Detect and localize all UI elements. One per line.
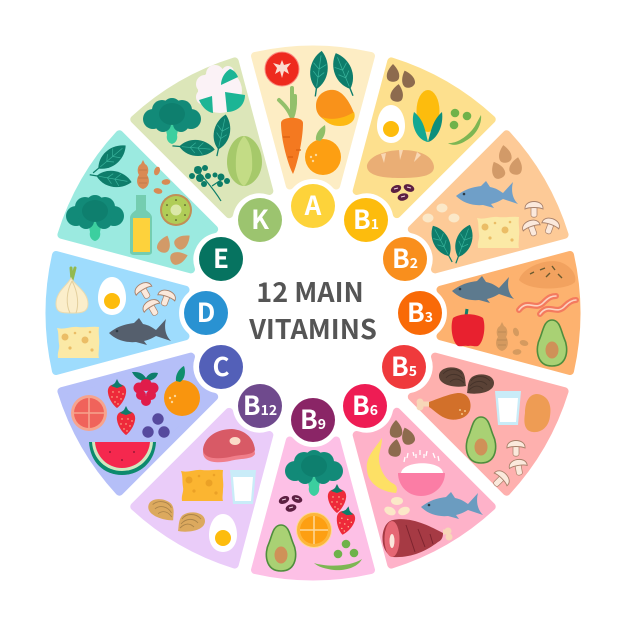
icon: milk — [230, 470, 256, 504]
icon: egg — [377, 105, 405, 143]
icon: lettuce — [227, 136, 262, 186]
icon: broccoli — [285, 450, 343, 496]
icon: mushrooms — [132, 280, 177, 319]
icon: peanut — [496, 322, 508, 351]
badge: C — [199, 345, 243, 389]
icon: strawberries — [108, 379, 135, 435]
icon: strawberries — [328, 484, 357, 537]
icon: watermelon — [89, 442, 156, 475]
wedge: vitamin B3 — [440, 255, 576, 371]
badge: B1 — [344, 198, 388, 242]
badge: B3: B3 — [407, 293, 433, 330]
badge: D: D — [197, 293, 215, 330]
icon: avocado — [466, 417, 496, 463]
badge: A: A — [304, 186, 322, 223]
title — [248, 271, 377, 347]
icon: cheese — [181, 470, 223, 501]
icon: red pepper — [452, 309, 484, 346]
icon: steak — [203, 429, 255, 462]
icon: ham — [382, 519, 452, 557]
icon: almonds — [155, 231, 194, 266]
badge: K: K — [251, 200, 269, 237]
icon: carrot — [279, 88, 303, 174]
wedge: vitamin C — [56, 327, 232, 495]
icon: egg — [209, 514, 237, 552]
icon: bacon — [519, 296, 576, 314]
icon: mushrooms — [521, 202, 561, 239]
icon: clams — [439, 367, 494, 394]
wedge: vitamin B5 — [394, 327, 570, 495]
icon: cheese — [57, 327, 99, 358]
title: 12 MAIN — [256, 271, 364, 310]
icon: peanut — [137, 160, 149, 189]
badge: D — [184, 291, 228, 335]
icon: cheese — [477, 217, 519, 248]
icon: fish — [109, 318, 171, 345]
icon: peas and pod — [448, 109, 481, 145]
icon: orange — [305, 125, 341, 175]
badge: B3 — [398, 291, 442, 335]
icon: parsley — [189, 165, 230, 201]
badge: K — [238, 198, 282, 242]
badge: B2 — [383, 237, 427, 281]
icon: spinach — [172, 113, 234, 158]
icon: almonds — [488, 144, 524, 181]
wedge: vitamin B6 — [327, 394, 495, 570]
icon: potato — [524, 394, 550, 432]
icon: kiwi — [160, 194, 192, 226]
badge: B9 — [291, 398, 335, 442]
icon: seeds — [387, 420, 417, 458]
badge: B2: B2 — [392, 239, 418, 276]
wedge: vitamin B9 — [255, 440, 371, 576]
icon: banana — [367, 438, 397, 493]
icon: nuts — [153, 166, 171, 195]
icon: fish — [421, 492, 483, 519]
wedge: vitamin B2 — [394, 131, 570, 299]
wedge: vitamin K — [131, 56, 299, 232]
icon: egg — [98, 277, 126, 315]
icon: seeds — [387, 64, 417, 103]
icon: mango — [316, 90, 355, 126]
icon: tomato — [265, 52, 299, 86]
badge: B1: B1 — [353, 200, 379, 237]
icon: corn — [413, 90, 442, 142]
icon: clams — [147, 497, 205, 532]
icon: peas and pod — [314, 540, 362, 570]
badge: B12 — [238, 384, 282, 428]
icon: milk — [495, 391, 521, 425]
icon: bread — [367, 150, 434, 178]
icon: orange — [164, 366, 200, 416]
icon: spinach — [307, 50, 361, 99]
icon: orange slice — [296, 512, 332, 548]
badge: B5: B5 — [391, 347, 417, 384]
icon: spinach — [426, 222, 477, 266]
icon: cauliflower — [196, 65, 245, 113]
icon: nuts — [512, 327, 529, 355]
icon: onion — [56, 268, 88, 313]
badge: B6 — [343, 384, 387, 428]
icon: fish — [456, 181, 518, 208]
icon: avocado — [537, 320, 567, 366]
badge: B5 — [382, 345, 426, 389]
badge: B6: B6 — [352, 386, 378, 423]
wedge: vitamin B12 — [131, 394, 299, 570]
wedge: vitamin A — [255, 50, 371, 186]
icon: mushrooms — [488, 440, 529, 492]
icon: grapefruit — [71, 395, 107, 431]
badge: E — [199, 237, 243, 281]
icon: beans — [389, 183, 415, 202]
title: VITAMINS — [248, 308, 377, 347]
icon: broccoli — [66, 195, 124, 241]
badge: B12: B12 — [243, 386, 277, 423]
wedge: vitamin B1 — [327, 56, 495, 232]
icon: fish — [452, 276, 514, 303]
badge: A — [291, 184, 335, 228]
icon: spinach — [88, 139, 133, 190]
badge: B9: B9 — [300, 400, 326, 437]
wedge: vitamin D — [50, 255, 186, 371]
badge: C: C — [212, 347, 230, 384]
badge: E: E — [213, 239, 229, 276]
icon: chicken leg — [416, 393, 471, 420]
icon: broccoli — [143, 98, 201, 144]
wedge: vitamin E — [56, 131, 232, 299]
icon: pale beans — [422, 204, 460, 222]
icon: oil bottle — [130, 195, 152, 255]
icon: blueberries — [142, 413, 170, 438]
icon: avocado — [266, 525, 296, 571]
icon: raspberry — [132, 372, 158, 406]
icon: rice bowl — [398, 450, 445, 496]
icon: pale beans — [383, 497, 411, 517]
icon: beans — [277, 494, 303, 513]
icon: salmon — [519, 261, 575, 288]
